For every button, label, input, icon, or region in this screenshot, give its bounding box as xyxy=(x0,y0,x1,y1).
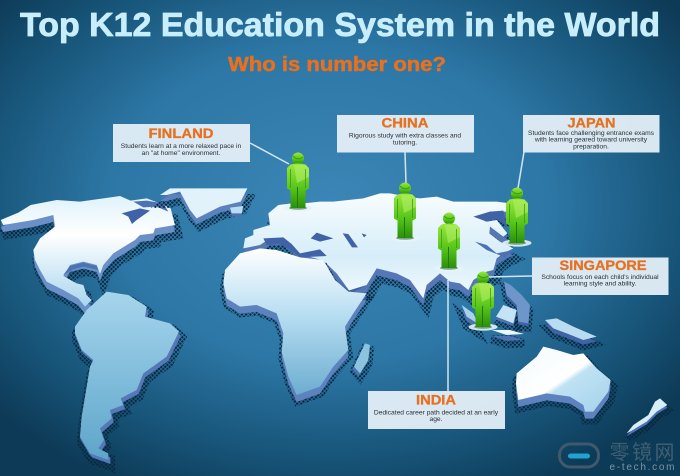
panel: Japan xyxy=(523,115,660,152)
panel: Singapore: Schools focus on each child's individual xyxy=(541,274,659,281)
figure: Finland xyxy=(284,152,312,212)
figure: China xyxy=(390,182,420,242)
Eurasia xyxy=(243,193,517,309)
Australia xyxy=(516,347,612,419)
figure: Singapore xyxy=(468,272,498,331)
Greenland xyxy=(160,188,250,228)
islands of South-East Asia xyxy=(462,282,597,347)
panel: India xyxy=(368,391,505,429)
world map xyxy=(1,188,669,466)
panel: India: Dedicated career path decided at an early xyxy=(374,410,499,416)
panel: India: age. xyxy=(429,416,443,423)
panel: Japan: preparation. xyxy=(573,144,609,150)
panel: Singapore: SINGAPORE xyxy=(560,258,646,273)
panel: Finland: Students learn at a more relaxed pace in xyxy=(121,143,242,150)
panel: Finland: FINLAND xyxy=(148,126,214,141)
panel: China xyxy=(337,115,474,152)
New Zealand xyxy=(627,398,669,439)
Madagascar xyxy=(353,343,370,378)
map: Africa, Eurasia, islands xyxy=(223,193,597,402)
watermark logo: e-tech.com xyxy=(610,462,674,473)
panel: Singapore: learning style and ability. xyxy=(564,280,637,288)
map: Americas and Greenland xyxy=(1,188,250,466)
panel: China: tutoring. xyxy=(393,140,417,146)
panel: China: Rigorous study with extra classes and xyxy=(349,132,461,140)
title: Top K12 Education System in the World xyxy=(20,6,660,43)
map: Australia and New Zealand xyxy=(516,347,669,439)
panel: Japan: with learning geared toward university xyxy=(534,136,648,144)
watermark logo xyxy=(560,441,674,473)
panel: India: INDIA xyxy=(416,392,456,408)
South America xyxy=(75,292,181,466)
panel: China: CHINA xyxy=(382,116,429,130)
panel: Singapore xyxy=(532,258,668,295)
North America xyxy=(1,196,178,317)
figure: India xyxy=(434,212,464,272)
connector lines xyxy=(250,143,532,391)
Africa xyxy=(223,248,367,402)
panel: Japan: JAPAN xyxy=(568,116,616,130)
panel: Japan: Students face challenging entrance exams xyxy=(528,130,655,137)
panel: Finland: an "at home" environment. xyxy=(142,150,220,157)
subtitle: Who is number one? xyxy=(228,54,446,76)
panel: Finland xyxy=(113,124,250,162)
figure: Japan xyxy=(502,188,532,247)
watermark logo: 零镜网 xyxy=(610,441,674,464)
